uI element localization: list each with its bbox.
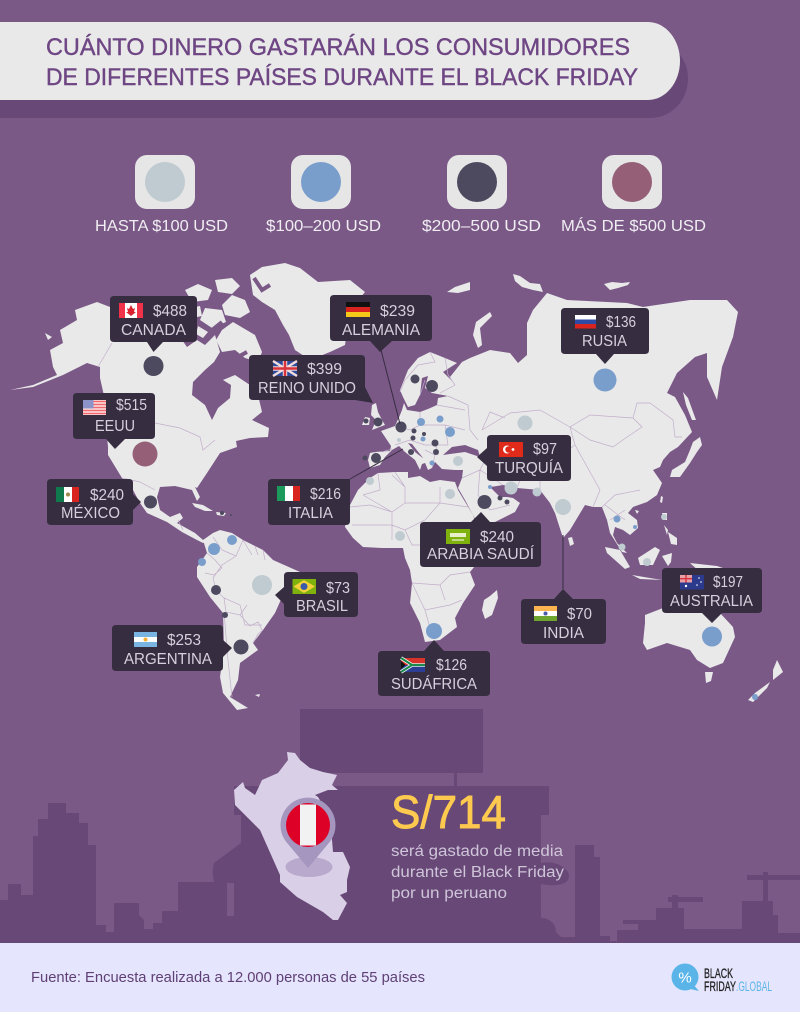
- legend item: 200-500: $200–500 USD: [422, 218, 541, 235]
- flag: Italy: [277, 486, 300, 501]
- legend item: up to 100: HASTA $100 USD: [95, 218, 228, 235]
- callout: México: [47, 479, 141, 525]
- arctic islands: [45, 278, 262, 362]
- pin shadow: [286, 857, 332, 877]
- callout: Alemania: $239: [380, 303, 415, 320]
- logo: FRIDAY: [704, 978, 736, 994]
- callout: Sudáfrica: [378, 640, 490, 696]
- callout: Reino Unido: $399: [307, 361, 342, 378]
- callout: Italia: ITALIA: [288, 505, 334, 522]
- callout: Canada: CANADA: [121, 322, 187, 339]
- title text: CUÁNTO DINERO GASTARÁN LOS CONSUMIDORES: [46, 34, 630, 61]
- logo: [672, 964, 772, 994]
- callout: México: MÉXICO: [61, 505, 120, 522]
- legend item: 100-200: $100–200 USD: [266, 218, 381, 235]
- callout: EEUU: EEUU: [95, 418, 135, 435]
- callout: Reino Unido: [249, 355, 373, 403]
- callout: Canada: [110, 296, 197, 352]
- callout: India: [521, 535, 606, 644]
- callout: Turquía: $97: [533, 441, 557, 458]
- callout: México: $240: [90, 487, 124, 504]
- logo: %: [678, 970, 692, 986]
- madagascar: [482, 590, 498, 619]
- callout: India: $70: [567, 606, 592, 623]
- southeast asia islands: [568, 496, 745, 582]
- africa: [345, 472, 510, 642]
- callout: Rusia: $136: [606, 314, 636, 331]
- logo: .GLOBAL: [736, 978, 772, 994]
- callout: Alemania: ALEMANIA: [342, 322, 421, 339]
- callout: Arabia Saudí: [420, 512, 541, 567]
- dots: under 100: [252, 416, 667, 595]
- flag: Saudi Arabia: [446, 529, 470, 544]
- flag: Argentina: [134, 632, 157, 647]
- callout: EEUU: [73, 393, 155, 449]
- flag: Turkey: [499, 442, 523, 457]
- country borders: [98, 343, 682, 697]
- logo: BLACK: [704, 965, 733, 981]
- flag: Russia: [575, 315, 596, 328]
- flag: Mexico: [56, 487, 79, 502]
- title banner: [0, 22, 688, 118]
- legend item: over 500: MÁS DE $500 USD: [561, 218, 706, 235]
- peru description: durante el Black Friday: [391, 864, 564, 881]
- russian arctic islands: [447, 274, 630, 348]
- flag: Brazil: [292, 579, 316, 594]
- legend item: 100-200: [266, 155, 381, 235]
- title text: DE DIFERENTES PAÍSES DURANTE EL BLACK FRIDAY: [46, 64, 638, 91]
- inland seas and channels: [200, 278, 503, 470]
- north america: [10, 302, 269, 543]
- legend item: 200-500: [422, 155, 541, 235]
- callout: Australia: AUSTRALIA: [670, 593, 754, 610]
- leader line: India: [562, 535, 564, 589]
- callout: Arabia Saudí: ARABIA SAUDÍ: [427, 546, 535, 563]
- callout: Sudáfrica: $126: [436, 657, 467, 674]
- continents: [10, 263, 783, 710]
- greenland: [250, 263, 365, 360]
- peru description: será gastado de media: [391, 843, 563, 860]
- leader line: Italia: [350, 449, 403, 479]
- flag: Australia: [680, 575, 704, 590]
- leader line: Alemania: [381, 350, 400, 424]
- footer: [0, 943, 800, 1012]
- callout: Turquía: [477, 435, 571, 481]
- callout: Brasil: $73: [326, 580, 350, 597]
- dot: over 500: [132, 442, 158, 466]
- data dots: [132, 356, 758, 700]
- callout: Canada: $488: [153, 303, 187, 320]
- dots: 200 to 500: [144, 356, 510, 654]
- callout: Italia: [268, 449, 403, 525]
- callout: EEUU: $515: [116, 397, 147, 414]
- peru statistic: S/714: [391, 786, 506, 838]
- callout: Argentina: [112, 625, 232, 671]
- peru description: por un peruano: [391, 885, 507, 902]
- flag: India: [534, 606, 557, 621]
- world map: [10, 263, 783, 710]
- sakhalin and japan: [670, 392, 702, 477]
- flag: Canada: [119, 303, 143, 318]
- callout: India: INDIA: [543, 625, 585, 642]
- south america: [197, 530, 300, 710]
- flag: USA: [83, 400, 106, 415]
- callout: Brasil: BRASIL: [296, 598, 348, 615]
- callout: Argentina: ARGENTINA: [124, 651, 213, 668]
- legend item: over 500: [561, 155, 706, 235]
- eurasia: [368, 293, 738, 553]
- flag: South Africa: [401, 658, 425, 672]
- callout: Rusia: RUSIA: [582, 333, 628, 350]
- callout: Brasil: [275, 572, 358, 617]
- peru outline: [234, 752, 350, 920]
- peru flag: [286, 803, 330, 847]
- peru map with pin: [234, 752, 350, 920]
- flag: Germany: [346, 302, 370, 317]
- dots: 100 to 200: [198, 368, 758, 700]
- callout: Alemania: [330, 295, 432, 424]
- legend item: up to 100: [95, 155, 228, 235]
- callout: Reino Unido: REINO UNIDO: [258, 380, 356, 397]
- location pin: [280, 798, 336, 868]
- callout: Sudáfrica: SUDÁFRICA: [391, 676, 478, 693]
- peru statistic: [391, 786, 564, 902]
- legend: [95, 155, 706, 235]
- city skyline background: [0, 709, 800, 943]
- source text: Fuente: Encuesta realizada a 12.000 personas de 55 países: [31, 969, 425, 986]
- australia: [643, 600, 735, 668]
- callout: Australia: [662, 568, 762, 623]
- uk and ireland: [362, 403, 385, 430]
- callout: Argentina: $253: [167, 632, 201, 649]
- callout: Arabia Saudí: $240: [480, 529, 514, 546]
- tasmania and new zealand: [705, 660, 783, 702]
- callout: Turquía: TURQUÍA: [495, 460, 564, 477]
- callout: Australia: $197: [713, 574, 743, 591]
- flag: UK: [273, 361, 297, 376]
- caribbean: [192, 503, 260, 697]
- callout: Rusia: [561, 308, 649, 364]
- callout: Italia: $216: [310, 486, 341, 503]
